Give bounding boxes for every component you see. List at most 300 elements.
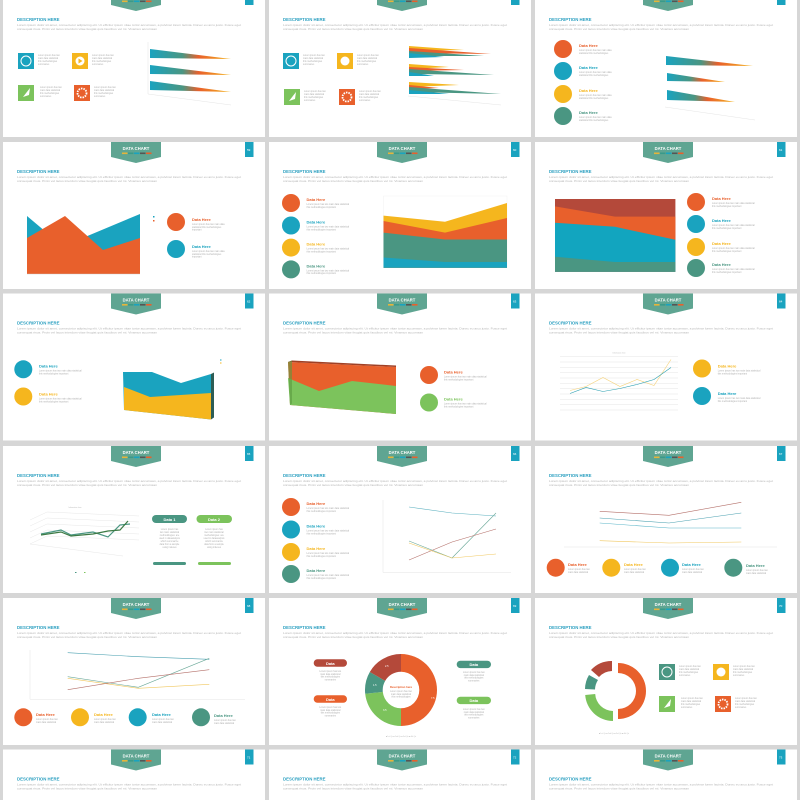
pill right top <box>457 661 491 682</box>
exploded donut <box>585 661 646 735</box>
slide 62: 3D area chart: DATA CHART <box>123 298 150 302</box>
data list: Data Here <box>712 241 731 246</box>
data list: Lorem ipsum has two main data statistical <box>306 226 350 228</box>
icon grid: this methodologies <box>304 96 324 99</box>
donut: 1.5 <box>373 684 377 687</box>
slide 66: line chart with list: 66 <box>513 452 517 456</box>
icon grid: summaries <box>40 95 52 98</box>
slide 65: 3D line chart with data pills <box>3 446 265 593</box>
heading: DESCRIPTION HERE <box>549 17 592 22</box>
slide 61: 100% stacked area: Lorem ipsum dolor sit amet, consectetur adipiscing elit. Ut efficitur ipsum vitae tortor accumsan, a pulvinar lorem lacinia. Donec eu arcu justo. Fusce eget <box>549 176 773 179</box>
slide 65: 3D line chart with data pills: 65 <box>247 452 251 456</box>
data row: main data statistical <box>682 571 703 574</box>
data pill 1: Data 1 <box>163 517 176 522</box>
slide 69: donut chart: 69 <box>513 604 517 608</box>
data row: Lorem ipsum has two <box>682 568 705 571</box>
slide 70: exploded donut with icons: DATA CHART <box>655 602 682 607</box>
slide 61: 100% stacked area: consequat risus. Proin vel lacus interdum vitae feugiat quis faucibus vel mi. Vivamus accumsan <box>549 180 690 183</box>
pill right bottom: Data <box>469 698 479 703</box>
slide 59: area chart: consequat risus. Proin vel lacus interdum vitae feugiat quis faucibus vel mi. Vivamus accumsan <box>17 180 158 183</box>
icon grid: main data statistical <box>304 93 325 96</box>
slide 71 (partial): DATA CHART <box>123 754 150 758</box>
data row: Data Here <box>152 712 171 717</box>
icon grid: main data statistical <box>681 700 702 703</box>
line chart <box>383 500 511 572</box>
icon grid: summaries <box>92 63 104 66</box>
slide 66: line chart with list: Lorem ipsum dolor sit amet, consectetur adipiscing elit. Ut efficitur ipsum vitae tortor accumsan, a pulvinar lorem lacinia. Donec eu arcu justo. Fusce eget <box>283 480 507 483</box>
data items: Data Here <box>192 244 211 249</box>
donut: Description here <box>390 685 412 689</box>
data pill 2: Lorem ipsum has <box>205 528 224 531</box>
slide 67: line chart with bottom row: consequat risus. Proin vel lacus interdum vitae feugiat quis faucibus vel mi. Vivamus accumsan <box>549 484 690 487</box>
icon grid: this methodologies <box>303 60 323 63</box>
heading: DESCRIPTION HERE <box>283 17 326 22</box>
slide 60: stacked area chart: consequat risus. Proin vel lacus interdum vitae feugiat quis faucibus vel mi. Vivamus accumsan <box>283 180 424 183</box>
slide 58: data list with cone chart <box>535 0 797 137</box>
data list: statistical this methodologies <box>579 52 609 55</box>
data items: this methodologies important <box>39 400 69 403</box>
icon grid: summaries <box>94 95 106 98</box>
pill right bottom: this methodologies <box>464 714 484 717</box>
icon grid: Lorem ipsum has two <box>303 54 326 57</box>
data row: main data statistical <box>214 722 235 725</box>
data pill 1: two main statistical <box>160 531 180 534</box>
slide 73 (partial) <box>535 750 797 800</box>
icon grid <box>18 53 117 101</box>
pill right top: Data <box>469 662 479 667</box>
slide 64: line chart: Lorem ipsum dolor sit amet, consectetur adipiscing elit. Ut efficitur ipsum vitae tortor accumsan, a pulvinar lorem lacinia. Donec eu arcu justo. Fusce eget <box>549 328 773 330</box>
heading: DESCRIPTION HERE <box>17 320 60 326</box>
data items: statistical this methodologies <box>192 226 222 229</box>
data list <box>282 194 350 278</box>
icon grid: this methodologies <box>38 60 58 63</box>
data items: important <box>192 229 202 232</box>
data list: Lorem ipsum has two main data statistical <box>306 203 350 206</box>
icon grid: summaries <box>303 63 315 66</box>
data items: Data Here <box>39 364 58 368</box>
slide 57: icons with layered bar chart <box>269 0 531 137</box>
slide 60: stacked area chart <box>269 142 531 289</box>
slide 72 (partial): DATA CHART <box>389 754 416 758</box>
donut: Lorem ipsum has two <box>390 690 413 693</box>
heading: DESCRIPTION HERE <box>283 320 326 326</box>
data list: Lorem ipsum has two main data statistical <box>306 269 350 272</box>
data items <box>167 213 225 259</box>
data list: Data Here <box>306 546 326 551</box>
slide 61: 100% stacked area: DATA CHART <box>655 146 682 151</box>
data row: main data statistical <box>624 571 645 574</box>
data items: Data Here <box>444 370 463 374</box>
slide 59: area chart: DATA CHART <box>123 146 150 151</box>
slide 63: 3D stacked area chart: consequat risus. Proin vel lacus interdum vitae feugiat quis faucibus vel mi. Vivamus accumsan <box>283 332 424 334</box>
pill left top <box>314 659 347 681</box>
slide 73 (partial): 73 <box>779 756 783 760</box>
icon grid: main data statistical <box>735 700 756 703</box>
data items: Lorem ipsum has two main data statistical <box>444 402 487 406</box>
data list: Data Here <box>579 65 598 70</box>
icon grid: summaries <box>357 63 369 66</box>
data list: Lorem ipsum has two main data <box>579 94 612 97</box>
cone chart <box>148 42 231 105</box>
data pill 2: data from a sample <box>204 543 225 546</box>
data list: this methodologies important <box>712 271 742 274</box>
data list: Lorem ipsum has two main data statistical <box>306 248 350 251</box>
icon grid <box>659 664 758 712</box>
slide 59: area chart: Lorem ipsum dolor sit amet, consectetur adipiscing elit. Ut efficitur ipsum vitae tortor accumsan, a pulvinar lorem lacinia. Donec eu arcu justo. Fusce eget <box>17 176 241 179</box>
icon grid: Lorem ipsum has two <box>679 665 702 668</box>
icon grid: Lorem ipsum has two <box>735 697 758 700</box>
icon grid: this methodologies <box>40 92 60 95</box>
data list: Data Here <box>306 263 326 268</box>
icon grid: main data statistical <box>357 57 378 60</box>
data pill 1: Lorem ipsum has <box>161 528 179 531</box>
icon grid: main data statistical <box>94 89 115 92</box>
slide 67: line chart with bottom row <box>535 446 797 593</box>
data pill 1 <box>152 515 187 565</box>
heading: DESCRIPTION HERE <box>549 625 592 630</box>
line chart <box>30 650 245 699</box>
slide 57: icons with layered bar chart: Lorem ipsum dolor sit amet, consectetur adipiscing elit. Ut efficitur ipsum vitae tortor accumsan, a pulvinar lorem lacinia. Donec eu arcu justo. Fusce eget <box>283 24 507 27</box>
icon grid: this methodologies <box>681 703 701 706</box>
stacked area <box>555 199 675 272</box>
slide 69: donut chart: DATA CHART <box>389 602 416 607</box>
donut: 2.5 <box>385 665 389 668</box>
slide 61: 100% stacked area <box>535 142 797 289</box>
data list: Data Here <box>306 524 326 528</box>
slide 57: icons with layered bar chart: consequat risus. Proin vel lacus interdum vitae feugiat quis faucibus vel mi. Vivamus accumsan <box>283 28 424 31</box>
slide 66: line chart with list: DATA CHART <box>389 450 416 455</box>
icon grid: main data statistical <box>679 668 700 671</box>
data row <box>547 559 769 577</box>
slide 56: icons with cone bar chart: consequat risus. Proin vel lacus interdum vitae feugiat quis faucibus vel mi. Vivamus accumsan <box>17 28 158 31</box>
data list: Data Here <box>712 262 731 267</box>
icon grid: Lorem ipsum has two <box>357 54 380 57</box>
data list: this methodologies important <box>306 577 336 580</box>
slide 69: donut chart: consequat risus. Proin vel lacus interdum vitae feugiat quis faucibus vel mi. Vivamus accumsan <box>283 636 424 639</box>
slide 71 (partial): Lorem ipsum dolor sit amet, consectetur adipiscing elit. Ut efficitur ipsum vitae tortor accumsan, a pulvinar lorem lacinia. Donec eu arcu justo. Fusce eget <box>17 784 241 786</box>
data items: Lorem ipsum has two main data <box>192 223 225 226</box>
heading: DESCRIPTION HERE <box>17 473 60 478</box>
data list: statistical this methodologies <box>579 119 609 122</box>
data list: Data Here <box>306 501 326 506</box>
data list <box>687 193 755 277</box>
slide 73 (partial): DATA CHART <box>655 754 682 758</box>
icon grid: this methodologies <box>679 671 699 674</box>
heading: DESCRIPTION HERE <box>549 169 592 174</box>
slide 56: icons with cone bar chart <box>3 0 265 137</box>
slide 68: line chart with bottom row: 68 <box>247 604 251 608</box>
data row: Data Here <box>624 562 643 567</box>
data items <box>14 360 82 406</box>
data row: Data Here <box>214 713 233 718</box>
data list: statistical this methodologies <box>579 97 609 100</box>
data pill 1: used in dataanalysis <box>159 537 181 540</box>
stacked area <box>384 196 507 268</box>
donut: this methodologies <box>391 696 411 699</box>
pill right bottom: main data statistical <box>464 711 484 714</box>
data items <box>420 366 487 412</box>
slide 64: line chart: DATA CHART <box>655 298 682 302</box>
data list: this methodologies important <box>712 250 742 253</box>
pill left bottom: Lorem ipsum has two <box>319 706 342 709</box>
line chart: Information here <box>612 352 626 354</box>
data pill 2: methodologies: are <box>204 534 224 537</box>
slide 68: line chart with bottom row <box>3 598 265 745</box>
slide 70: exploded donut with icons: 70 <box>779 604 783 608</box>
3d chart <box>288 360 396 414</box>
pill right top: this methodologies <box>464 677 484 680</box>
slide 58: data list with cone chart: consequat risus. Proin vel lacus interdum vitae feugiat quis faucibus vel mi. Vivamus accumsan <box>549 28 690 31</box>
data pill 1: data from a sample <box>160 543 180 546</box>
data items: this methodologies important <box>718 372 747 375</box>
icon grid: main data statistical <box>733 668 754 671</box>
icon grid: Lorem ipsum has two <box>40 86 63 89</box>
icon grid: summaries <box>679 674 691 677</box>
data items: this methodologies important <box>444 378 474 381</box>
exploded donut: ■ 1st Qtr ■ 2nd Qtr ■ 3rd Qtr ■ 4th Qtr <box>599 732 630 735</box>
pill left top: main data statistical <box>320 673 341 676</box>
slide 72 (partial) <box>269 750 531 800</box>
slide 69: donut chart <box>269 598 531 745</box>
data list: this methodologies important <box>306 228 336 231</box>
data items: Lorem ipsum has two main data statistical <box>39 398 82 400</box>
data list: Data Here <box>306 242 326 247</box>
donut: ■ 1st Qtr ■ 2nd Qtr ■ 3rd Qtr ■ 4th Qtr <box>386 735 417 738</box>
pill right top: main data statistical <box>464 674 484 677</box>
data list: Data Here <box>712 196 731 201</box>
slide 62: 3D area chart: consequat risus. Proin vel lacus interdum vitae feugiat quis faucibus vel mi. Vivamus accumsan <box>17 332 158 334</box>
data items: Lorem ipsum has two main data <box>192 250 225 253</box>
icon grid: Lorem ipsum has two <box>38 54 61 57</box>
heading: DESCRIPTION HERE <box>17 776 60 782</box>
slide 66: line chart with list: consequat risus. Proin vel lacus interdum vitae feugiat quis faucibus vel mi. Vivamus accumsan <box>283 484 424 487</box>
data list: Data Here <box>579 43 598 48</box>
slide 71 (partial) <box>3 750 265 800</box>
data list: Data Here <box>306 220 326 224</box>
pill left bottom <box>314 695 347 717</box>
pill right top: Lorem ipsum has two <box>463 671 485 674</box>
icon grid: this methodologies <box>92 60 112 63</box>
data items: Data Here <box>39 392 58 396</box>
icon grid: Lorem ipsum has two <box>681 697 704 700</box>
data items: statistical this methodologies <box>192 253 222 256</box>
data row: Data Here <box>682 562 701 567</box>
data list: Lorem ipsum has two main data statistical <box>306 574 350 577</box>
slide 62: 3D area chart: Lorem ipsum dolor sit amet, consectetur adipiscing elit. Ut efficitur ipsum vitae tortor accumsan, a pulvinar lorem lacinia. Donec eu arcu justo. Fusce eget <box>17 328 241 330</box>
data row: main data statistical <box>152 721 173 724</box>
data items: Lorem ipsum has two main data statistical <box>718 370 761 372</box>
heading: DESCRIPTION HERE <box>549 776 592 782</box>
3d line chart: Information here <box>68 506 82 509</box>
data pill 2: two main statistical <box>204 531 224 534</box>
data list: this methodologies important <box>306 272 336 275</box>
data row: Lorem ipsum has two <box>94 718 117 721</box>
data list: Data Here <box>579 88 598 93</box>
data row: Data Here <box>36 712 55 717</box>
pill left bottom: summaries <box>325 714 337 717</box>
heading: DESCRIPTION HERE <box>283 776 326 782</box>
data items: this methodologies important <box>444 405 474 408</box>
icon grid: this methodologies <box>733 671 753 674</box>
slide 61: 100% stacked area: 61 <box>779 148 783 152</box>
data list: statistical this methodologies <box>579 74 609 77</box>
slide 72 (partial): Lorem ipsum dolor sit amet, consectetur adipiscing elit. Ut efficitur ipsum vitae tortor accumsan, a pulvinar lorem lacinia. Donec eu arcu justo. Fusce eget <box>283 784 507 786</box>
data items <box>693 360 761 405</box>
data list: this methodologies important <box>306 206 336 209</box>
pill left top: this methodologies <box>321 676 341 679</box>
icon grid: this methodologies <box>94 92 114 95</box>
slide 67: line chart with bottom row: Lorem ipsum dolor sit amet, consectetur adipiscing elit. Ut efficitur ipsum vitae tortor accumsan, a pulvinar lorem lacinia. Donec eu arcu justo. Fusce eget <box>549 480 773 483</box>
data pill 1: using indexes <box>162 547 177 549</box>
icon grid: summaries <box>304 99 316 102</box>
icon grid: summaries <box>681 706 693 709</box>
donut: main data statistical <box>391 693 412 696</box>
icon grid: summaries <box>733 674 745 677</box>
heading: DESCRIPTION HERE <box>283 625 326 630</box>
data list: Lorem ipsum has two main data statistical <box>306 530 350 532</box>
data row: Data Here <box>94 712 113 717</box>
area chart <box>27 214 154 274</box>
data list: this methodologies important <box>306 555 336 558</box>
icon grid: main data statistical <box>92 57 113 60</box>
icon grid <box>283 53 382 105</box>
pill right bottom: Lorem ipsum has two <box>463 708 485 711</box>
data items: Lorem ipsum has two main data statistical <box>718 397 761 400</box>
slide 70: exploded donut with icons: consequat risus. Proin vel lacus interdum vitae feugiat quis faucibus vel mi. Vivamus accumsan <box>549 636 690 639</box>
data list: this methodologies important <box>712 205 742 208</box>
data pill 1: which summarize <box>161 540 179 543</box>
data list: this methodologies important <box>306 532 336 535</box>
slide 64: line chart: 64 <box>779 300 783 304</box>
slide 63: 3D stacked area chart: DATA CHART <box>389 298 416 302</box>
data list <box>554 40 612 125</box>
slide 62: 3D area chart: 62 <box>247 300 251 304</box>
icon grid: summaries <box>359 99 371 102</box>
slide 64: line chart <box>535 294 797 440</box>
data list: Lorem ipsum has two main data statistical <box>712 247 755 250</box>
slide 70: exploded donut with icons: Lorem ipsum dolor sit amet, consectetur adipiscing elit. Ut efficitur ipsum vitae tortor accumsan, a pulvinar lorem lacinia. Donec eu arcu justo. Fusce eget <box>549 632 773 635</box>
slide 65: 3D line chart with data pills: DATA CHART <box>123 450 150 455</box>
data items: Data Here <box>718 364 737 368</box>
slide 62: 3D area chart <box>3 294 265 440</box>
data items: Lorem ipsum has two main data statistical <box>444 376 487 378</box>
heading: DESCRIPTION HERE <box>283 473 326 478</box>
icon grid: Lorem ipsum has two <box>359 90 382 93</box>
heading: DESCRIPTION HERE <box>283 169 326 174</box>
data row: main data statistical <box>746 572 767 575</box>
data list: Data Here <box>712 218 731 223</box>
slide 72 (partial): consequat risus. Proin vel lacus interdum vitae feugiat quis faucibus vel mi. Vivamus accumsan <box>283 788 424 790</box>
data row: Lorem ipsum has two <box>746 569 769 572</box>
data list: Lorem ipsum has two main data <box>579 116 612 119</box>
data list <box>282 498 350 583</box>
pill right bottom: summaries <box>468 716 480 719</box>
heading: DESCRIPTION HERE <box>549 473 592 478</box>
data list: Lorem ipsum has two main data <box>579 49 612 52</box>
data pill 2: used in dataanalysis <box>204 537 225 540</box>
data pill 2: using indexes <box>207 547 222 549</box>
pill left top: Lorem ipsum has two <box>319 670 342 673</box>
data items: important <box>192 256 202 259</box>
pill left bottom: main data statistical <box>320 709 341 712</box>
heading: DESCRIPTION HERE <box>549 320 592 326</box>
slide 65: 3D line chart with data pills: Lorem ipsum dolor sit amet, consectetur adipiscing elit. Ut efficitur ipsum vitae tortor accumsan, a pulvinar lorem lacinia. Donec eu arcu justo. Fusce eget <box>17 480 241 483</box>
icon grid: main data statistical <box>40 89 61 92</box>
icon grid: Lorem ipsum has two <box>94 86 117 89</box>
data list: this methodologies important <box>306 250 336 253</box>
slide 72 (partial): 72 <box>513 756 517 760</box>
slide 67: line chart with bottom row: DATA CHART <box>655 450 682 455</box>
data pill 2: Data 2 <box>208 517 221 522</box>
data list: Lorem ipsum has two main data statistical <box>712 202 755 205</box>
slide 67: line chart with bottom row: 67 <box>779 452 783 456</box>
data row: Lorem ipsum has two <box>36 718 59 721</box>
data list: Data Here <box>579 110 598 115</box>
cone chart <box>665 56 755 120</box>
icon grid: main data statistical <box>359 93 380 96</box>
slide 56: icons with cone bar chart: Lorem ipsum dolor sit amet, consectetur adipiscing elit. Ut efficitur ipsum vitae tortor accumsan, a pulvinar lorem lacinia. Donec eu arcu justo. Fusce eget <box>17 24 241 27</box>
slide 64: line chart: consequat risus. Proin vel lacus interdum vitae feugiat quis faucibus vel mi. Vivamus accumsan <box>549 332 690 334</box>
data pill 1: methodologies: are <box>160 534 180 537</box>
icon grid: Lorem ipsum has two <box>92 54 115 57</box>
data row: Data Here <box>568 562 587 567</box>
data list: Lorem ipsum has two main data statistical <box>712 224 755 227</box>
icon grid: Lorem ipsum has two <box>304 90 327 93</box>
data row: Data Here <box>746 563 765 568</box>
icon grid: main data statistical <box>38 57 59 60</box>
heading: DESCRIPTION HERE <box>17 17 60 22</box>
data list: Data Here <box>306 568 326 573</box>
line chart <box>564 502 777 547</box>
slide 68: line chart with bottom row: DATA CHART <box>123 602 150 607</box>
data list: Lorem ipsum has two main data statistical <box>306 552 350 555</box>
slide 71 (partial): 71 <box>247 756 251 760</box>
donut: 7.5 <box>431 697 435 700</box>
data row: Lorem ipsum has two <box>624 568 647 571</box>
slide 58: data list with cone chart: Lorem ipsum dolor sit amet, consectetur adipiscing elit. Ut efficitur ipsum vitae tortor accumsan, a pulvinar lorem lacinia. Donec eu arcu justo. Fusce eget <box>549 24 773 27</box>
data list: this methodologies important <box>306 510 336 513</box>
slide 73 (partial): consequat risus. Proin vel lacus interdum vitae feugiat quis faucibus vel mi. Vivamus accumsan <box>549 788 690 790</box>
data list: Lorem ipsum has two main data statistical <box>306 507 350 510</box>
slide 60: stacked area chart: 60 <box>513 148 517 152</box>
icon grid: summaries <box>38 63 50 66</box>
pill left bottom: this methodologies <box>321 712 341 715</box>
icon grid: this methodologies <box>359 96 379 99</box>
pill left bottom: Data <box>326 697 335 702</box>
data row: main data statistical <box>568 571 589 574</box>
donut <box>365 654 437 738</box>
data items: this methodologies important <box>718 400 747 403</box>
slide 63: 3D stacked area chart: Lorem ipsum dolor sit amet, consectetur adipiscing elit. Ut efficitur ipsum vitae tortor accumsan, a pulvinar lorem lacinia. Donec eu arcu justo. Fusce eget <box>283 328 507 330</box>
data pill 2 <box>196 515 232 565</box>
data pill 2: which summarize <box>205 540 224 543</box>
slide 70: exploded donut with icons <box>535 598 797 745</box>
pill right top: summaries <box>468 679 480 682</box>
data items: Data Here <box>192 217 211 222</box>
data items: this methodologies important <box>39 372 69 375</box>
data list: this methodologies important <box>712 227 742 230</box>
slide 63: 3D stacked area chart <box>269 294 531 440</box>
data row: main data statistical <box>94 721 115 724</box>
slide 60: stacked area chart: DATA CHART <box>389 146 416 151</box>
data row <box>14 708 237 726</box>
slide 68: line chart with bottom row: Lorem ipsum dolor sit amet, consectetur adipiscing elit. Ut efficitur ipsum vitae tortor accumsan, a pulvinar lorem lacinia. Donec eu arcu justo. Fusce eget <box>17 632 241 635</box>
data list: Lorem ipsum has two main data statistical <box>712 268 755 271</box>
slide 71 (partial): consequat risus. Proin vel lacus interdum vitae feugiat quis faucibus vel mi. Vivamus accumsan <box>17 788 158 790</box>
slide 59: area chart: 59 <box>247 148 251 152</box>
icon grid: this methodologies <box>357 60 377 63</box>
3d line chart <box>30 506 139 573</box>
